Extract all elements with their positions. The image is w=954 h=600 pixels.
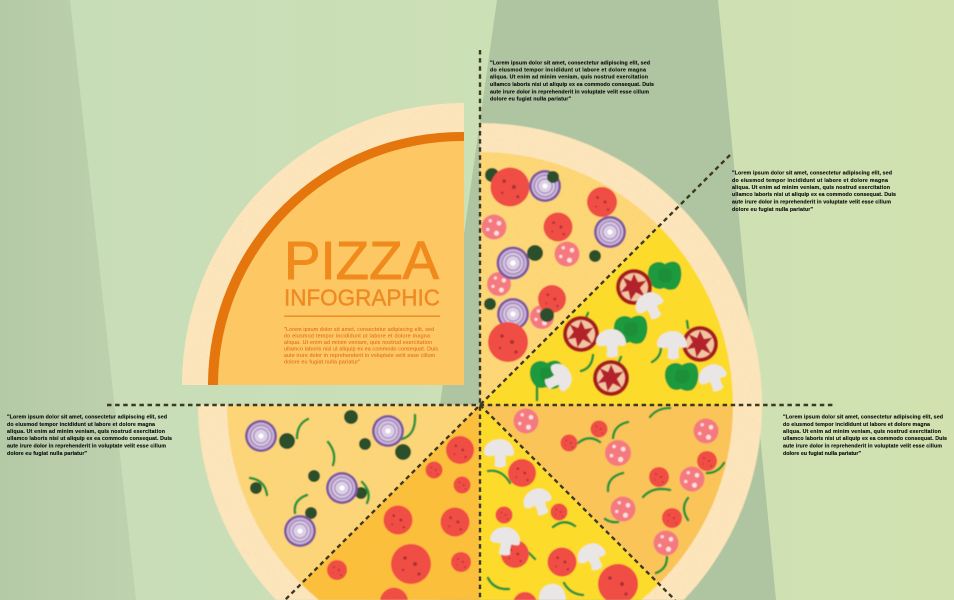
slice crust speckle	[182, 103, 464, 385]
intro text: do eiusmod tempor incididunt ut labore et dolore magna	[284, 334, 430, 340]
text block: left: aliqua. Ut enim ad minim veniam, quis nostrud exercitation	[7, 429, 165, 435]
text block: lower right	[783, 415, 947, 457]
text block: lower right: "Lorem ipsum dolor sit amet, consectetur adipiscing elit, sed	[783, 415, 943, 421]
pizza	[198, 123, 762, 600]
text block: upper right: ullamco laboris nisi ut aliquip ex ea commodo consequat. Duis	[732, 192, 896, 198]
text block: left: aute irure dolor in reprehenderit in voluptate velit esse cillum	[7, 444, 166, 450]
text block: left: dolore eu fugiat nulla pariatur"	[7, 451, 87, 457]
dashed divider lines	[107, 50, 836, 600]
text block: top: "Lorem ipsum dolor sit amet, consectetur adipiscing elit, sed	[490, 60, 650, 66]
slice: onion and olive	[227, 405, 480, 584]
intro text: aliqua. Ut enim ad minim veniam, quis nostrud exercitation	[284, 340, 432, 346]
toppings: pepperoni slice	[327, 436, 474, 600]
slice: pepperoni, salami and onion	[480, 152, 659, 405]
subtitle: INFOGRAPHIC	[284, 284, 440, 310]
intro text: dolore eu fugiat nulla pariatur"	[284, 360, 360, 366]
toppings: pepperoni, salami and onion slice	[482, 168, 626, 362]
text block: upper right: "Lorem ipsum dolor sit amet, consectetur adipiscing elit, sed	[732, 171, 892, 177]
crust	[198, 123, 762, 600]
crust speckle texture	[198, 123, 762, 600]
text block: upper right: do eiusmod tempor incididunt ut labore et dolore magna	[732, 178, 888, 184]
slice: pepperoni	[301, 405, 480, 600]
text block: left: ullamco laboris nisi ut aliquip ex ea commodo consequat. Duis	[7, 436, 172, 442]
slice cheese	[218, 141, 464, 385]
text block: upper right	[732, 171, 896, 213]
slice: tomato, pepper and mushroom	[480, 226, 733, 405]
text block: lower right: aute irure dolor in reprehenderit in voluptate velit esse cillum	[783, 444, 942, 450]
text block: top: dolore eu fugiat nulla pariatur"	[490, 97, 571, 103]
text block: left: do eiusmod tempor incididunt ut labore et dolore magna	[7, 422, 155, 428]
text block: left	[7, 415, 172, 457]
slice: salami and pepperoni	[480, 405, 733, 584]
text block: top: do eiusmod tempor incididunt ut labore et dolore magna	[490, 68, 646, 74]
title rule	[284, 316, 440, 317]
intro text: aute irure dolor in reprehenderit in voluptate velit esse cillum	[284, 353, 435, 359]
text block: top: aliqua. Ut enim ad minim veniam, quis nostrud exercitation	[490, 75, 648, 81]
text block: top: ullamco laboris nisi ut aliquip ex ea commodo consequat. Duis	[490, 82, 654, 88]
title: PIZZA	[284, 231, 439, 291]
text block: lower right: aliqua. Ut enim ad minim veniam, quis nostrud exercitation	[783, 429, 941, 435]
intro text: ullamco laboris nisi ut aliquip ex ea commodo consequat. Duis	[284, 346, 438, 352]
text block: left: "Lorem ipsum dolor sit amet, consectetur adipiscing elit, sed	[7, 415, 167, 421]
slice: pepperoni and mushroom	[480, 405, 659, 600]
text block: upper right: aute irure dolor in reprehenderit in voluptate velit esse cillum	[732, 200, 891, 206]
slice crust	[182, 103, 464, 385]
text block: lower right: do eiusmod tempor incididunt ut labore et dolore magna	[783, 422, 930, 428]
toppings: onion slice	[245, 410, 415, 547]
pulled-out slice with title	[182, 103, 464, 385]
text block: upper right: dolore eu fugiat nulla pariatur"	[732, 207, 813, 213]
intro text: "Lorem ipsum dolor sit amet, consectetur adipiscing elit, sed	[284, 327, 434, 333]
top right shadow band	[440, 0, 776, 600]
left shadow band	[0, 0, 136, 600]
text block: upper right: aliqua. Ut enim ad minim veniam, quis nostrud exercitation	[732, 185, 890, 191]
text block: lower right: dolore eu fugiat nulla pariatur"	[783, 451, 861, 457]
text block: top: aute irure dolor in reprehenderit in voluptate velit esse cillum	[490, 90, 649, 96]
toppings: salami slice	[514, 408, 724, 573]
slice sauce rim	[208, 132, 464, 385]
toppings: mushroom and pepperoni slice	[484, 439, 638, 600]
text block: lower right: ullamco laboris nisi ut aliquip ex ea commodo consequat. Duis	[783, 436, 947, 442]
intro text	[284, 327, 438, 366]
text block: top	[490, 60, 654, 103]
toppings: tomato, pepper and mushroom slice	[530, 262, 731, 400]
